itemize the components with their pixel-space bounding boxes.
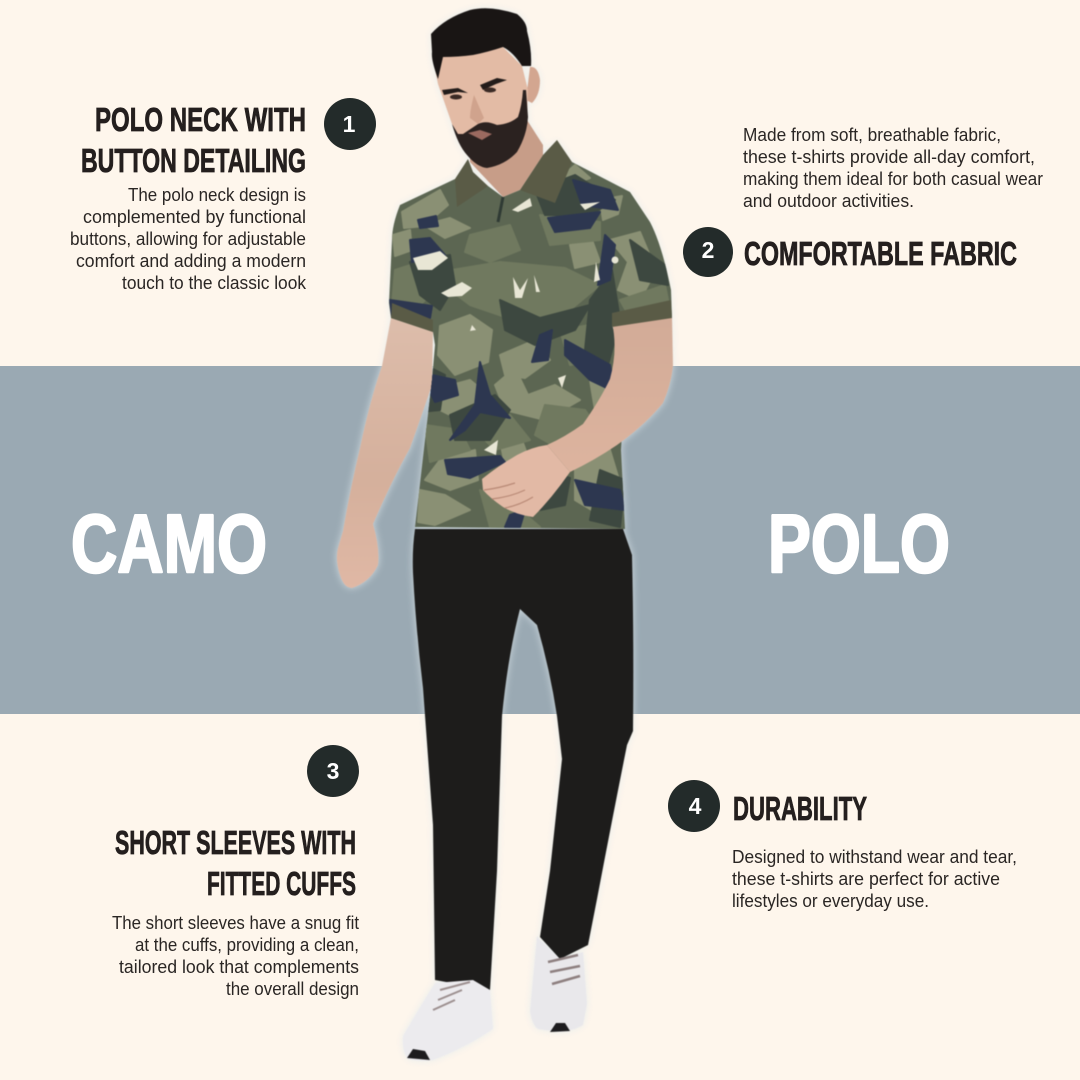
heading 3: SHORT SLEEVES WITH: [115, 824, 356, 861]
feature 4: [668, 780, 1017, 911]
left arm: [337, 318, 433, 588]
title word: POLO: POLO: [768, 497, 950, 590]
body 2: [743, 125, 1043, 211]
number 4: 4: [689, 793, 702, 819]
heading 3: [115, 824, 356, 902]
badge 4: [668, 780, 720, 832]
collar and cuffs: [391, 140, 672, 332]
body 1: comfort and adding a modern: [76, 251, 306, 271]
body 1: [70, 185, 307, 293]
body 4: these t-shirts are perfect for active: [732, 869, 1000, 889]
body 2: these t-shirts provide all-day comfort,: [743, 147, 1035, 167]
title word: CAMO: CAMO: [71, 497, 267, 590]
heading 1: POLO NECK WITH: [95, 101, 306, 138]
model figure: [337, 8, 680, 1061]
badge 3: [307, 745, 359, 797]
body 2: and outdoor activities.: [743, 191, 914, 211]
body 4: [732, 847, 1017, 911]
body 3: the overall design: [226, 979, 359, 999]
feature 3: [112, 745, 359, 999]
ear: [526, 67, 540, 103]
right shoe: [530, 936, 587, 1032]
band: blue-grey stripe: [0, 366, 1080, 714]
body 4: Designed to withstand wear and tear,: [732, 847, 1017, 867]
beard: [452, 90, 528, 168]
badge 1: [324, 98, 376, 150]
neck: [470, 120, 543, 197]
face: [433, 47, 528, 168]
heading 1: BUTTON DETAILING: [81, 142, 306, 179]
body 1: buttons, allowing for adjustable: [70, 229, 306, 249]
body 2: making them ideal for both casual wear: [743, 169, 1043, 189]
number 2: 2: [702, 237, 714, 263]
body 2: Made from soft, breathable fabric,: [743, 125, 1001, 145]
shirt: [385, 140, 680, 535]
body 1: complemented by functional: [83, 207, 306, 227]
body 3: at the cuffs, providing a clean,: [135, 935, 359, 955]
body 3: The short sleeves have a snug fit: [112, 913, 359, 933]
camo patches: [393, 165, 656, 525]
badge 2: [683, 227, 733, 277]
right arm: [547, 316, 673, 472]
number 1: 1: [343, 111, 356, 137]
heading 4: DURABILITY: [733, 790, 867, 827]
hand: [482, 445, 570, 517]
placket: [498, 197, 503, 222]
body 3: [112, 913, 359, 999]
body 4: lifestyles or everyday use.: [732, 891, 929, 911]
heading 1: [81, 101, 306, 179]
number 3: 3: [327, 758, 339, 784]
eye brows and eyes: [442, 78, 507, 124]
lips: [468, 130, 492, 140]
feature 2: [683, 125, 1043, 277]
heading 3: FITTED CUFFS: [207, 865, 356, 902]
feature 1: [70, 98, 376, 293]
body 1: touch to the classic look: [122, 273, 307, 293]
left shoe: [403, 980, 493, 1061]
body 3: tailored look that complements: [119, 957, 359, 977]
hair: [431, 8, 531, 79]
pants: [413, 529, 633, 990]
body 1: The polo neck design is: [128, 185, 306, 205]
